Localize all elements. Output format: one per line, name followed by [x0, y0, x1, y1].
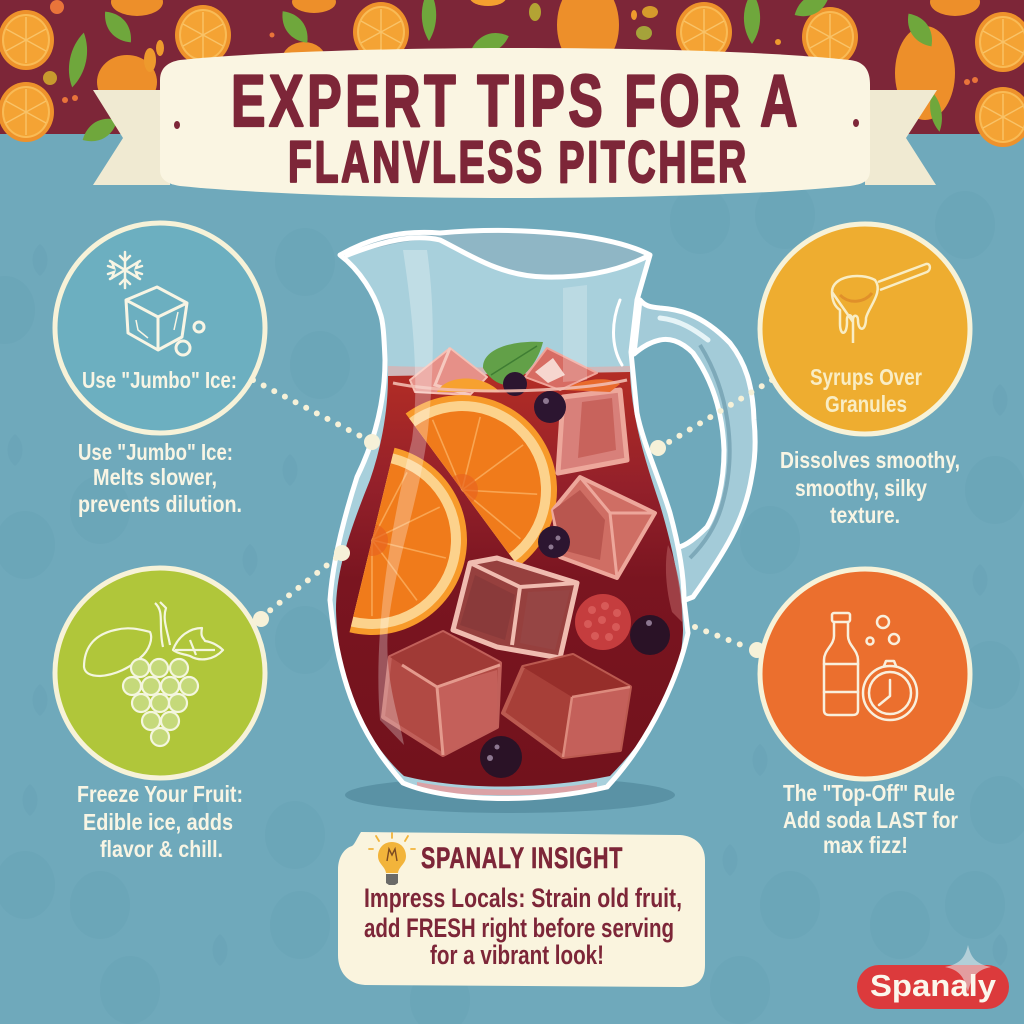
tip: syrups: [760, 224, 970, 528]
title line 2: FLANVLESS PITCHER: [288, 130, 749, 195]
freeze fruit description: [77, 781, 243, 862]
callout body: [364, 883, 682, 970]
callout heading: SPANALY INSIGHT: [421, 842, 623, 875]
banner body: [160, 48, 870, 198]
blueberry 3: [630, 615, 670, 655]
top-off description: [783, 780, 958, 858]
tip: freeze fruit: [55, 568, 265, 862]
orange slice back: [406, 357, 595, 566]
syrups label: Granules: [825, 391, 907, 417]
jumbo ice description: Melts slower,: [93, 464, 217, 490]
syrups description: [780, 447, 960, 528]
fruit pattern band: [0, 0, 1024, 148]
blueberry 4: [480, 736, 522, 778]
top-off description: The "Top-Off" Rule: [783, 780, 955, 806]
freeze fruit description: flavor & chill.: [100, 836, 223, 862]
ice cube top right: [558, 390, 627, 473]
syrups label: [810, 364, 922, 417]
floating ice cube right: [525, 348, 597, 390]
ice cube bottom left: [383, 632, 500, 755]
syrups label: Syrups Over: [810, 364, 922, 390]
callout body: for a vibrant look!: [430, 940, 604, 970]
syrups circle: [760, 224, 970, 434]
mint leaf: [483, 342, 543, 385]
connector: freeze fruit: [253, 545, 350, 627]
jumbo ice label: Use "Jumbo" Ice:: [82, 367, 237, 393]
raspberry: [575, 594, 631, 650]
top-off description: max fizz!: [823, 832, 908, 858]
jumbo ice description: [78, 439, 242, 517]
orange rind at surface: [437, 378, 500, 392]
jumbo ice circle: [55, 223, 265, 433]
tip: jumbo ice: [55, 223, 265, 517]
icon: lemon and grapes: [84, 602, 223, 746]
icon: snowflake: [108, 252, 142, 288]
connector: syrups: [650, 380, 772, 456]
icon: ice cube: [126, 287, 204, 355]
jumbo ice description: prevents dilution.: [78, 491, 242, 517]
jumbo ice description: Use "Jumbo" Ice:: [78, 439, 233, 465]
sangria liquid: [336, 372, 683, 786]
freeze fruit circle: [55, 568, 265, 778]
ice cube center: [453, 558, 577, 658]
connector: top-off: [695, 627, 765, 658]
freeze fruit description: Edible ice, adds: [83, 809, 233, 835]
pitcher shadow: [345, 777, 675, 813]
left ribbon tail: [93, 90, 170, 185]
ice cube bottom right: [503, 655, 630, 757]
callout: Spanaly insight: [338, 832, 705, 987]
connector: jumbo ice: [253, 380, 380, 450]
pitcher base: [417, 782, 597, 795]
pitcher opening: [345, 232, 648, 276]
tip: top-off: [760, 569, 970, 858]
callout body: add FRESH right before serving: [364, 913, 674, 943]
surface tint: [388, 366, 630, 382]
pitcher illustration: [330, 231, 755, 813]
logo: Spanaly: [857, 945, 1009, 1009]
blueberry 1: [534, 391, 566, 423]
top-off description: Add soda LAST for: [783, 807, 958, 833]
title banner: [93, 48, 937, 198]
icon: soda bottle and stopwatch: [824, 613, 917, 720]
title line 1: EXPERT TIPS FOR A: [231, 61, 801, 142]
banner rivets: [174, 119, 859, 129]
orange slice front: [350, 448, 487, 655]
freeze fruit description: Freeze Your Fruit:: [77, 781, 243, 807]
glass body: [330, 234, 687, 798]
icon: light bulb: [369, 833, 415, 885]
syrups description: smoothy, silky: [795, 475, 927, 501]
callout body: Impress Locals: Strain old fruit,: [364, 883, 682, 913]
berry under surface: [503, 372, 527, 396]
syrups description: Dissolves smoothy,: [780, 447, 960, 473]
callout box: [338, 832, 705, 987]
icon: honey spoon: [832, 264, 930, 343]
liquid surface line: [393, 380, 627, 391]
top-off circle: [760, 569, 970, 779]
blueberry 2: [538, 526, 570, 558]
logo sparkle: [945, 945, 991, 992]
right ribbon tail: [865, 90, 937, 185]
ice cube middle right: [553, 477, 655, 578]
glass highlights: [378, 250, 433, 745]
pitcher handle: [634, 300, 755, 602]
logo wordmark: Spanaly: [870, 968, 997, 1003]
syrups description: texture.: [830, 502, 900, 528]
floating ice cube left: [410, 348, 487, 395]
pitcher outline: [330, 231, 688, 799]
